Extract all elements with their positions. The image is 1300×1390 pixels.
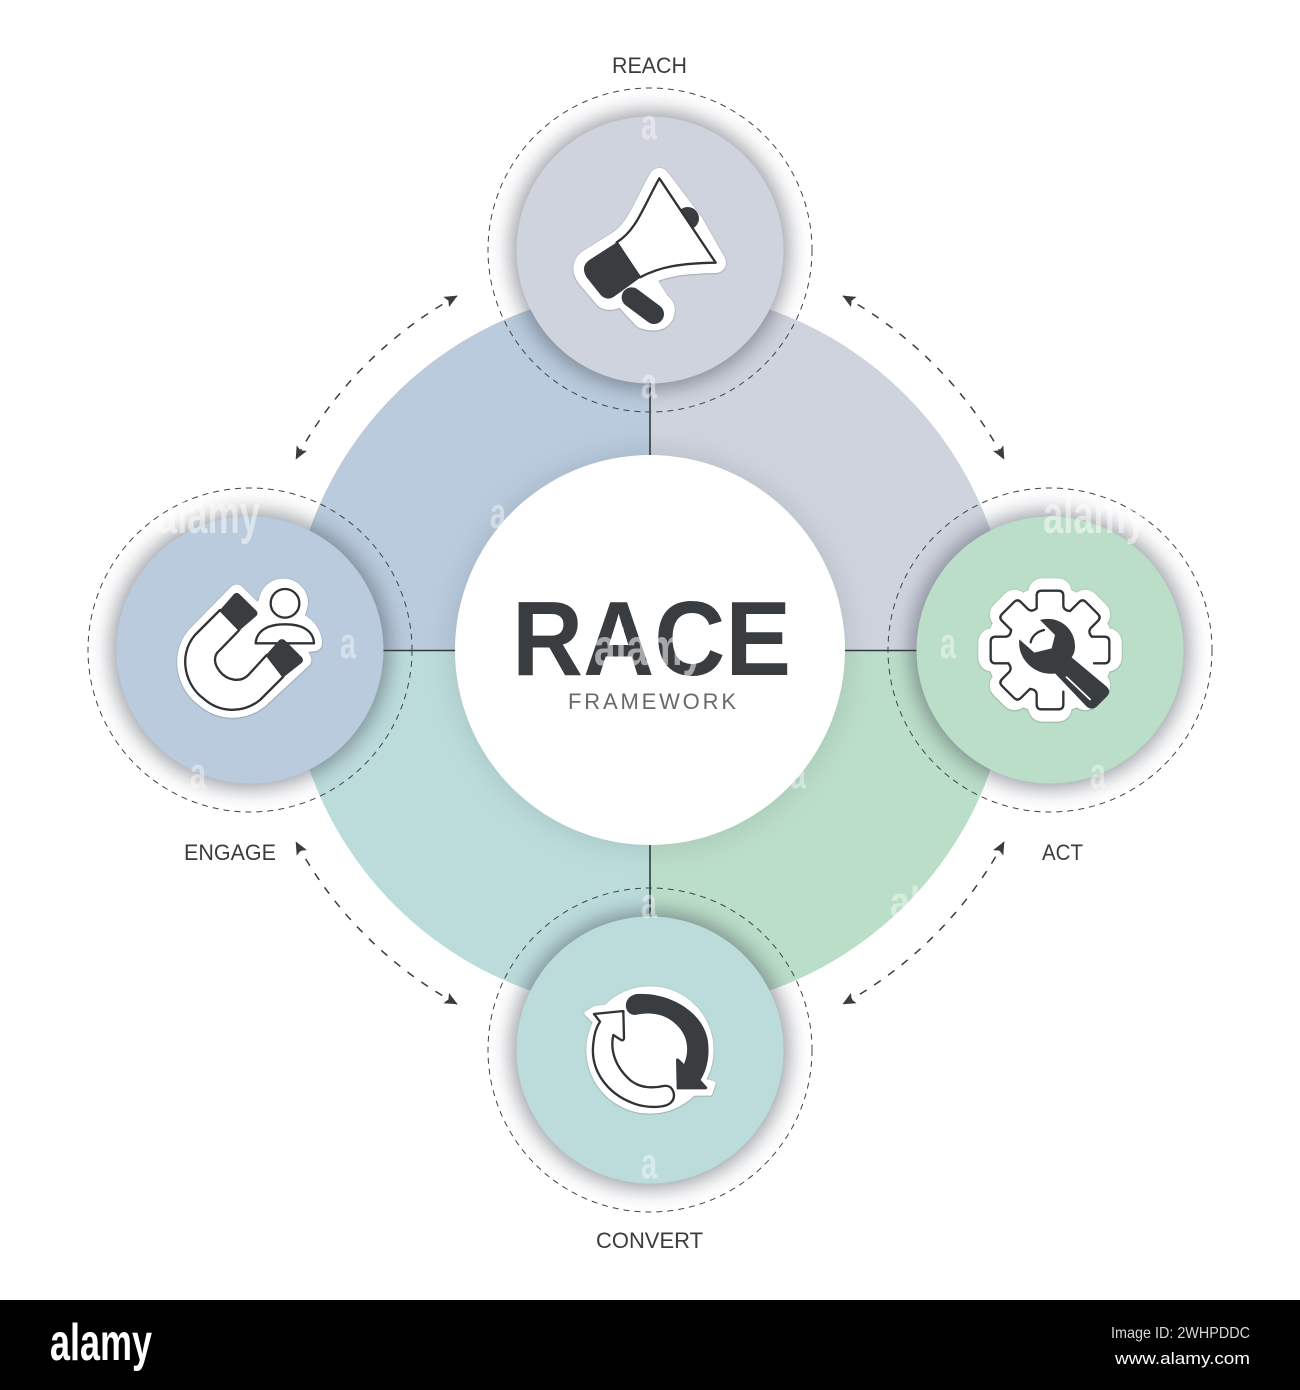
footer logo: alamy bbox=[50, 1314, 152, 1372]
satellite: reach circle bbox=[511, 111, 789, 389]
satellite: engage circle bbox=[111, 511, 389, 789]
watermarks: a bbox=[190, 749, 206, 798]
footer url: www.alamy.com bbox=[1114, 1349, 1250, 1368]
watermarks: alamy bbox=[157, 485, 260, 545]
center white circle bbox=[455, 455, 845, 845]
quadrant: top left blue bbox=[289, 289, 650, 650]
footer image id: Image ID: 2WHPDDC bbox=[1111, 1325, 1250, 1342]
dashed arrow: convert to engage bbox=[296, 842, 457, 1004]
dashed arrow: act to convert bbox=[843, 842, 1004, 1004]
watermarks: a bbox=[340, 619, 356, 668]
icon: magnet with person bbox=[185, 587, 314, 710]
watermarks: a bbox=[641, 100, 657, 149]
icon: cycle arrows bbox=[586, 986, 714, 1114]
label: act: ACT bbox=[1042, 840, 1083, 865]
label: convert: CONVERT bbox=[596, 1228, 703, 1253]
dashed arrow: reach to act bbox=[843, 296, 1004, 459]
title: RACE: RACE bbox=[512, 580, 791, 698]
watermarks: a bbox=[790, 749, 806, 798]
quadrant: bottom left teal bbox=[289, 650, 650, 1011]
center circle shadow bbox=[452, 452, 848, 848]
dashed rings bbox=[88, 88, 1212, 1212]
icon: gear and wrench bbox=[978, 578, 1122, 722]
label: reach: REACH bbox=[612, 53, 687, 78]
watermarks: a bbox=[641, 1139, 657, 1188]
footer bar bbox=[0, 1300, 1300, 1390]
quadrant: bottom right green bbox=[650, 650, 1011, 1011]
watermarks: a bbox=[641, 879, 657, 928]
connector lines bbox=[375, 375, 925, 925]
satellite: convert circle bbox=[511, 911, 789, 1189]
watermarks: a bbox=[1090, 749, 1106, 798]
watermarks: al bbox=[890, 878, 920, 927]
watermarks: a bbox=[490, 489, 506, 538]
watermarks: alamy bbox=[1043, 485, 1146, 545]
watermarks: a bbox=[940, 619, 956, 668]
subtitle: FRAMEWORK: FRAMEWORK bbox=[568, 689, 736, 714]
dashed arrow: engage to reach bbox=[296, 296, 457, 459]
satellite: act circle bbox=[911, 511, 1189, 789]
label: engage: ENGAGE bbox=[184, 840, 276, 865]
watermarks: a bbox=[641, 359, 657, 408]
watermarks bbox=[157, 100, 1146, 1188]
quadrant: top right grey bbox=[650, 289, 1011, 650]
watermarks: alamy bbox=[594, 619, 704, 677]
icon: megaphone bbox=[584, 178, 716, 320]
